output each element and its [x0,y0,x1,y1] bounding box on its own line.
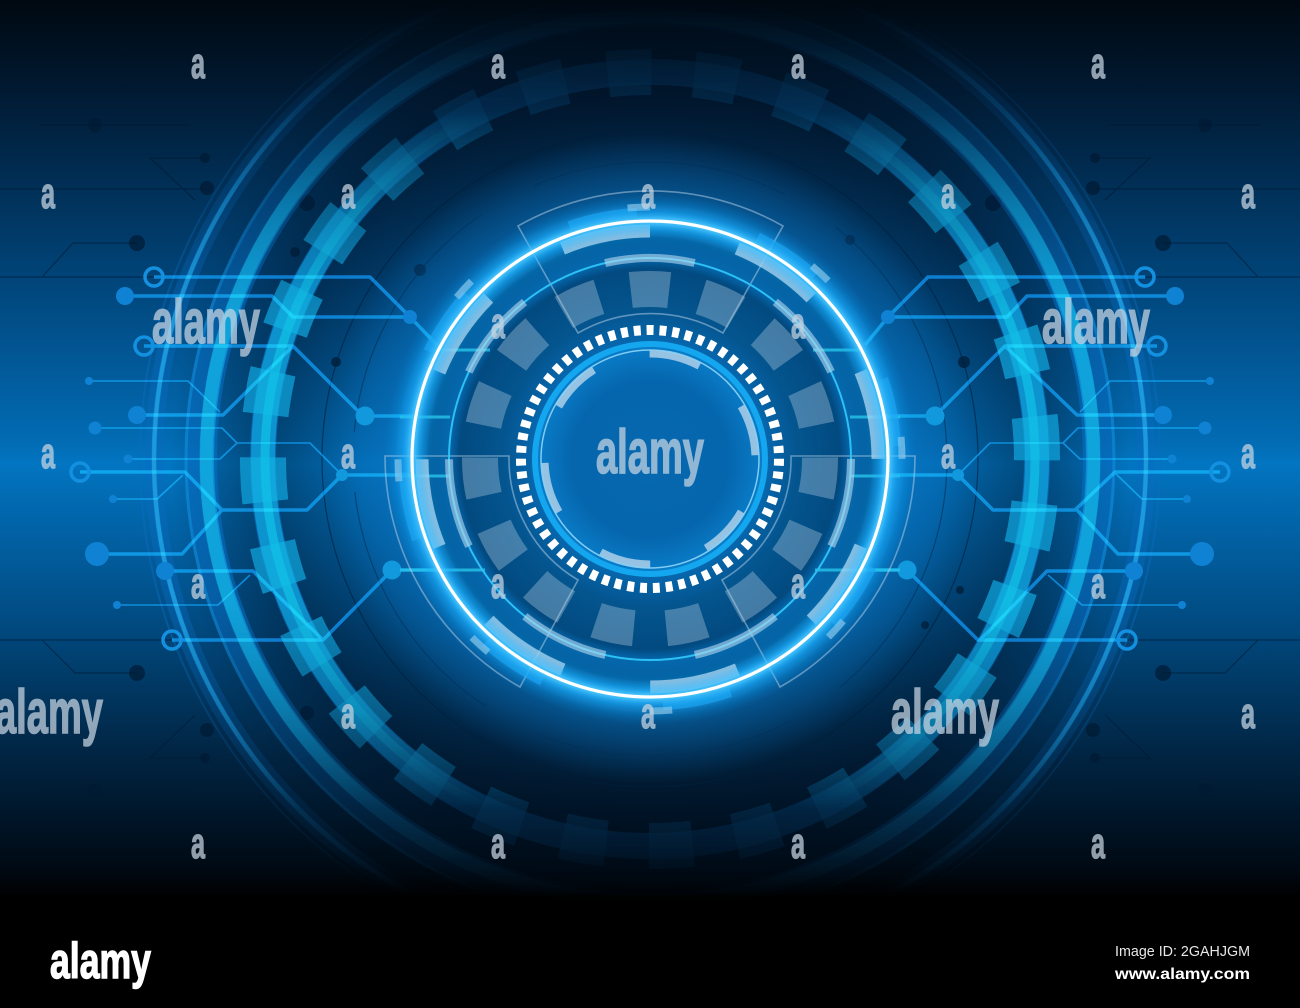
watermarks small: a [491,819,505,868]
ring r201 [409,218,891,700]
watermarks large: alamy [596,418,704,487]
outer circular rings [140,28,1160,880]
watermarks large [0,288,1150,747]
watermarks small: a [941,429,955,478]
bright cyan core of rings [152,120,1148,800]
middle ring [186,0,1114,923]
footer url: www.alamy.com [1114,966,1250,983]
sun disc and annulus [412,221,888,697]
footer image id: Image ID: 2GAHJGM [1115,943,1250,960]
circuit end nodes [71,268,1229,649]
circuit traces [80,277,1220,640]
watermarks large: alamy [1042,288,1150,357]
outermost ring [140,30,1160,880]
watermarks small: a [1091,559,1105,608]
watermarks small: a [341,169,355,218]
watermarks small: a [341,429,355,478]
dim circuit traces [0,118,1300,797]
inner segmented ring [223,32,1077,886]
outer blue arcs [320,129,980,789]
main glowing ring [412,221,888,697]
horizontal connectors into ring [400,350,900,570]
fifteen block segments [462,271,838,647]
watermarks small: a [791,299,805,348]
watermarks small: a [1091,39,1105,88]
watermarks small: a [641,169,655,218]
watermarks small: a [41,169,55,218]
watermarks small: a [491,559,505,608]
inner disc and rings [535,344,765,574]
watermarks large: alamy [0,678,103,747]
thin traces right [958,381,1210,605]
watermarks small: a [791,39,805,88]
white tick ring [518,327,782,591]
faint concentric arcs [322,131,978,787]
watermarks small: a [491,39,505,88]
watermarks small: a [191,819,205,868]
watermarks small: a [791,819,805,868]
thick traces left [80,277,490,640]
watermarks small: a [1241,689,1255,738]
watermarks small: a [341,689,355,738]
frame sectors [385,191,915,687]
watermarks small: a [41,429,55,478]
watermarks small: a [191,39,205,88]
thick traces right [810,277,1220,640]
watermarks small: a [791,559,805,608]
watermarks small: a [1241,169,1255,218]
core glow [325,134,975,784]
footer bar [0,905,1300,1008]
watermarks large: alamy [891,678,999,747]
watermarks small [41,39,1255,868]
watermarks small: a [941,169,955,218]
watermarks small: a [1091,819,1105,868]
thin traces left [89,381,342,605]
watermarks small: a [641,689,655,738]
footer logo: alamy [50,933,151,989]
watermarks small: a [491,299,505,348]
watermarks large: alamy [152,288,260,357]
watermarks small: a [1241,429,1255,478]
watermarks small: a [191,559,205,608]
pale segments inside main ring [352,161,948,757]
